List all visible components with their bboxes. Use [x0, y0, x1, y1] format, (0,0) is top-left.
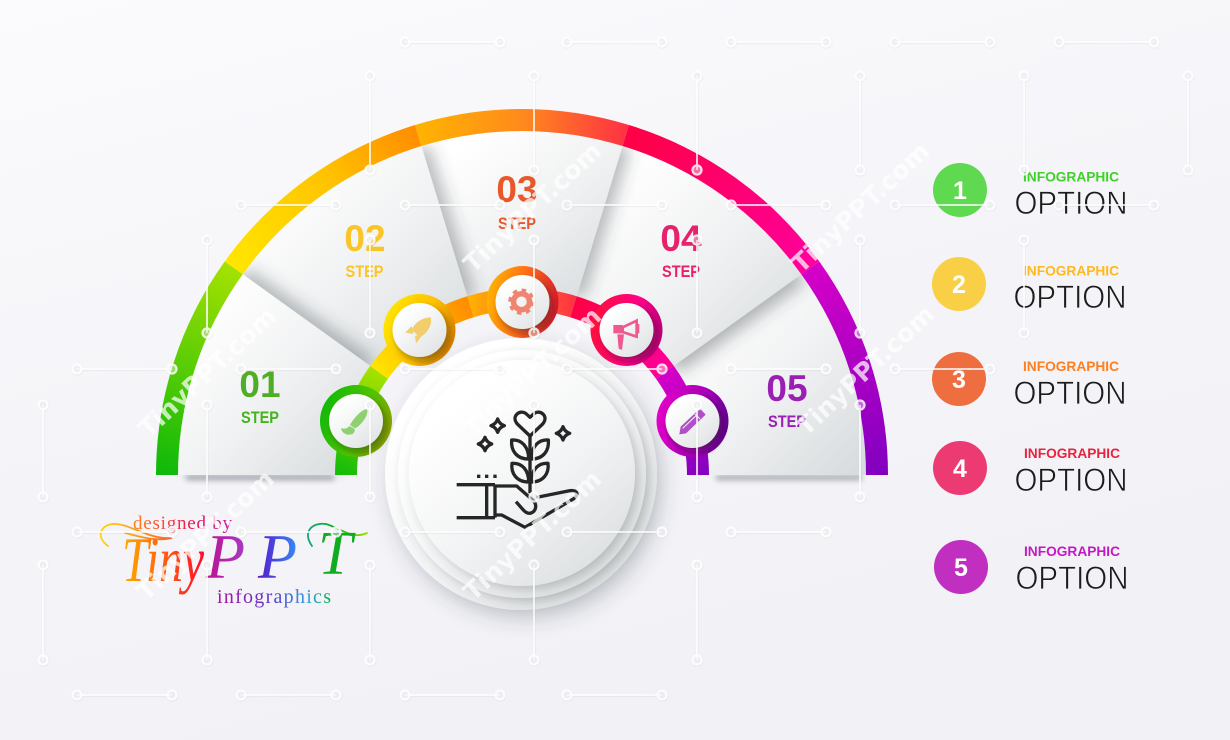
option 3: INFOGRAPHIC [1023, 358, 1119, 374]
step 04: 04 [660, 218, 702, 259]
wedge 2 [243, 146, 467, 366]
option 4: INFOGRAPHIC [1024, 445, 1120, 461]
option 4: OPTION [1014, 462, 1128, 498]
wedge 1 [178, 274, 370, 475]
step 01 [239, 364, 281, 427]
logo: designed by TinyPPT infographics: P [257, 521, 297, 592]
watermark: TinyPPT.com [458, 136, 607, 278]
step 02: STEP [346, 263, 384, 281]
step 03 [496, 169, 538, 233]
icon: megaphone [613, 321, 638, 350]
logo: designed by TinyPPT infographics: infographics [217, 586, 331, 608]
logo: designed by TinyPPT infographics: T [318, 520, 356, 588]
step 01: 01 [239, 364, 281, 405]
option 4 [933, 441, 1128, 498]
legend [932, 163, 1128, 596]
step 01: STEP [241, 409, 279, 427]
icon: gear [510, 291, 532, 313]
watermark [131, 136, 940, 606]
node 1: brush [320, 385, 392, 457]
option 5: 5 [954, 554, 968, 582]
option 2 [932, 257, 1126, 315]
icon: hand holding plant [457, 412, 577, 527]
option 2: INFOGRAPHIC [1023, 262, 1119, 278]
logo: designed by TinyPPT infographics: designed by [133, 513, 232, 534]
wedge 4 [577, 146, 801, 366]
option 5: INFOGRAPHIC [1024, 543, 1120, 559]
step 05: 05 [766, 368, 808, 409]
wedge 5 [674, 274, 866, 475]
icon: brush [341, 409, 367, 435]
wedge 3 [421, 131, 623, 296]
semicircle diagram [156, 109, 888, 480]
outer rainbow arc [156, 109, 888, 475]
icon: rocket [405, 317, 431, 343]
watermark: TinyPPT.com [133, 301, 282, 443]
central disc with icon [385, 338, 657, 610]
watermark: TinyPPT.com [786, 136, 935, 278]
inner rainbow arc [335, 288, 709, 475]
step labels [239, 169, 808, 431]
option 5: OPTION [1016, 560, 1128, 596]
step 04: STEP [662, 263, 700, 281]
option 1: OPTION [1014, 185, 1128, 221]
watermark: TinyPPT.com [791, 299, 940, 441]
bottom shadows under wedges [186, 475, 862, 480]
step 04 [660, 218, 702, 281]
option 3: 3 [952, 366, 966, 394]
option 1: INFOGRAPHIC [1023, 168, 1119, 184]
step 03: 03 [496, 169, 538, 210]
option 1 [933, 163, 1128, 221]
logo: designed by TinyPPT infographics: P [205, 521, 245, 592]
logo: designed by TinyPPT infographics: Tiny [122, 524, 204, 595]
node 4: megaphone [590, 294, 662, 366]
option 4: 4 [953, 455, 967, 483]
step 05: STEP [768, 413, 806, 431]
step 02: 02 [344, 218, 386, 259]
node 3: gear [486, 266, 558, 338]
watermark: TinyPPT.com [458, 464, 607, 606]
option 2: OPTION [1014, 279, 1126, 315]
step 02 [344, 218, 386, 281]
watermark: TinyPPT.com [458, 301, 607, 443]
node 5: pencil [656, 385, 728, 457]
option 2: 2 [952, 271, 966, 299]
watermark: TinyPPT.com [131, 464, 280, 606]
step 05 [766, 368, 808, 431]
step 03: STEP [498, 215, 536, 233]
option 5 [934, 540, 1128, 596]
option 3 [932, 352, 1126, 411]
option 3: OPTION [1014, 375, 1126, 411]
option 1: 1 [953, 177, 967, 205]
logo: designed by TinyPPT infographics [101, 513, 367, 608]
node 2: rocket [384, 294, 456, 366]
icon: pencil [679, 409, 706, 434]
logo swashes [101, 524, 367, 546]
